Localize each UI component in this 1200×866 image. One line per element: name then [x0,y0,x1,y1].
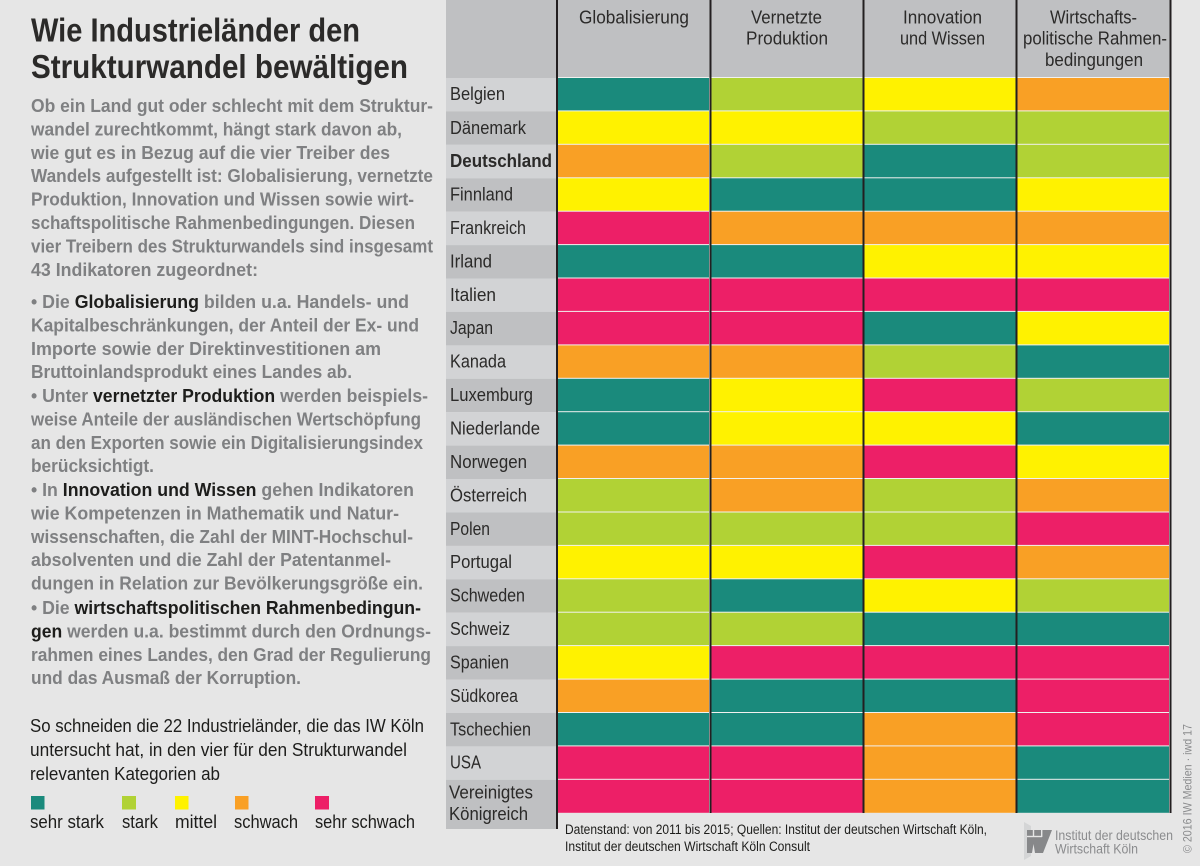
text block: Rahmenbedingungen: • Die wirtschaftspolitischen Rahmenbedingun- [31,597,421,618]
text block: Innovation und Wissen [30,479,423,594]
row: Luxemburg: Luxemburg [450,384,533,405]
legend: stark [122,812,159,832]
row: Italien: Italien [450,284,496,305]
row: Portugal: Portugal [450,551,512,572]
intro text block: Wandels aufgestellt ist: Globalisierung, vernetzte [31,165,433,186]
table header: und Wissen [900,28,985,49]
title: Strukturwandel bewältigen [31,48,408,85]
icon: IW logo [1024,822,1052,860]
row: Belgien [446,78,1169,111]
row: Österreich: Österreich [450,484,527,506]
title: Wie Industrieländer den [31,12,360,48]
row: Niederlande [446,412,1169,446]
row: Kanada: Kanada [450,350,507,372]
row: USA [446,746,1169,780]
row: Frankreich [446,212,1169,245]
text block: Rahmenbedingungen [31,597,431,688]
text block: Globalisierung: Importe sowie der Direktinvestitionen am [31,338,381,359]
row: Norwegen [446,446,1169,479]
row: Vereinigtes Königreich [446,780,1169,829]
publisher name: Institut der deutschen [1055,828,1173,843]
legend [30,796,415,832]
text block: Globalisierung: Bruttoinlandsprodukt eines Landes ab. [31,361,352,382]
publisher name [1055,828,1173,856]
row: Finnland [446,178,1169,212]
chart introduction text: untersucht hat, in den vier für den Strukturwandel [30,740,407,760]
table header: Wirtschafts- [1050,6,1137,28]
text block: Innovation und Wissen: wie Kompetenzen in Mathematik und Natur- [30,502,399,523]
intro text block: wie gut es in Bezug auf die vier Treiber des [30,142,390,163]
row: Belgien: Belgien [450,83,505,104]
text block: vernetzte Produktion: berücksichtigt. [31,455,154,476]
row: Norwegen: Norwegen [450,451,527,472]
intro text block: wandel zurechtkommt, hängt stark davon ab, [30,118,402,139]
row: Vereinigtes Königreich: Vereinigtes [449,782,533,802]
intro text block: Ob ein Land gut oder schlecht mit dem Struktur- [31,95,433,116]
row: Irland: Irland [450,250,492,272]
row: Japan [446,312,1169,345]
table header: bedingungen [1045,49,1143,70]
row: Japan: Japan [450,317,493,338]
chart introduction text [30,716,424,784]
row: Frankreich: Frankreich [450,217,526,238]
text block: Rahmenbedingungen: und das Ausmaß der Korruption. [31,667,301,688]
intro text block: Produktion, Innovation und Wissen sowie wirt- [31,189,414,210]
text block: vernetzte Produktion: • Unter vernetzter Produktion werden beispiels- [31,385,428,406]
text block: vernetzte Produktion: weise Anteile der ausländischen Wertschöpfung [30,408,421,429]
row: Niederlande: Niederlande [450,418,540,438]
row: Schweiz: Schweiz [450,618,510,639]
row: Dänemark [446,111,1169,145]
row: USA: USA [450,752,482,772]
source note: Datenstand: von 2011 bis 2015; Quellen: Institut der deutschen Wirtschaft Köln, [565,822,987,837]
row: Vereinigtes Königreich: Königreich [449,803,528,824]
row: Spanien: Spanien [450,652,509,672]
row: Luxemburg [446,379,1169,412]
row: Deutschland [446,145,1169,178]
row: Tschechien [446,713,1169,746]
row: Schweiz [446,613,1169,646]
intro text block: vier Treibern des Strukturwandels sind insgesamt [31,235,433,256]
text block: Globalisierung: • Die Globalisierung bilden u.a. Handels- und [31,291,409,312]
row: Polen [446,512,1169,546]
legend: schwach [234,812,298,832]
text block: Innovation und Wissen: absolventen und die Zahl der Patentanmel- [31,549,391,570]
table header: Innovation [903,6,982,28]
row: Kanada [446,345,1169,379]
title [31,12,408,85]
text block: vernetzte Produktion [30,385,428,476]
text block: vernetzte Produktion: an den Exporten sowie ein Digitalisierungsindex [31,432,424,453]
table header: Vernetzte [751,6,822,28]
copyright note: © 2016 IW Medien · iwd 17 [1180,724,1194,853]
source note [565,822,987,854]
row: Südkorea [446,680,1169,713]
row: Portugal [446,546,1169,579]
row: Italien [446,278,1169,312]
row: Schweden: Schweden [450,584,525,606]
chart introduction text: So schneiden die 22 Industrieländer, die das IW Köln [30,716,424,736]
text block: Innovation und Wissen: • In Innovation und Wissen gehen Indikatoren [31,479,414,500]
row: Dänemark: Dänemark [450,117,527,138]
chart introduction text: relevanten Kategorien ab [30,764,220,784]
legend: sehr schwach [315,812,415,832]
legend: mittel [175,812,217,832]
text block: Globalisierung [31,291,419,382]
row: Irland [446,245,1169,278]
row: Deutschland: Deutschland [450,150,552,171]
text block: Rahmenbedingungen: gen werden u.a. bestimmt durch den Ordnungs- [31,620,431,641]
row: Österreich [446,479,1169,512]
intro text block: schaftspolitische Rahmenbedingungen. Diesen [31,212,415,233]
column divider lines [556,0,1172,829]
row: Polen: Polen [450,518,490,539]
table header: Produktion [746,28,828,49]
publisher name: Wirtschaft Köln [1055,842,1138,856]
text block: Innovation und Wissen: dungen in Relation zur Bevölkerungsgröße ein. [31,573,423,594]
row: Tschechien: Tschechien [450,718,531,740]
text block: Innovation und Wissen: wissenschaften, die Zahl der MINT-Hochschul- [30,526,413,547]
table header: Globalisierung [579,6,689,28]
text block: Globalisierung: Kapitalbeschränkungen, der Anteil der Ex- und [31,314,419,335]
text block: Rahmenbedingungen: rahmen eines Landes, den Grad der Regulierung [31,644,431,665]
table cell backing [557,77,1170,813]
table header [446,0,1170,78]
table header: politische Rahmen- [1023,28,1167,49]
row: Südkorea: Südkorea [450,685,519,706]
legend: sehr stark [30,812,105,832]
row: Finnland: Finnland [450,184,513,204]
intro text block: 43 Indikatoren zugeordnet: [31,259,258,280]
intro text block [30,95,433,280]
source note: Institut der deutschen Wirtschaft Köln Consult [565,839,810,854]
row: Spanien [446,646,1169,680]
row: Schweden [446,579,1169,613]
